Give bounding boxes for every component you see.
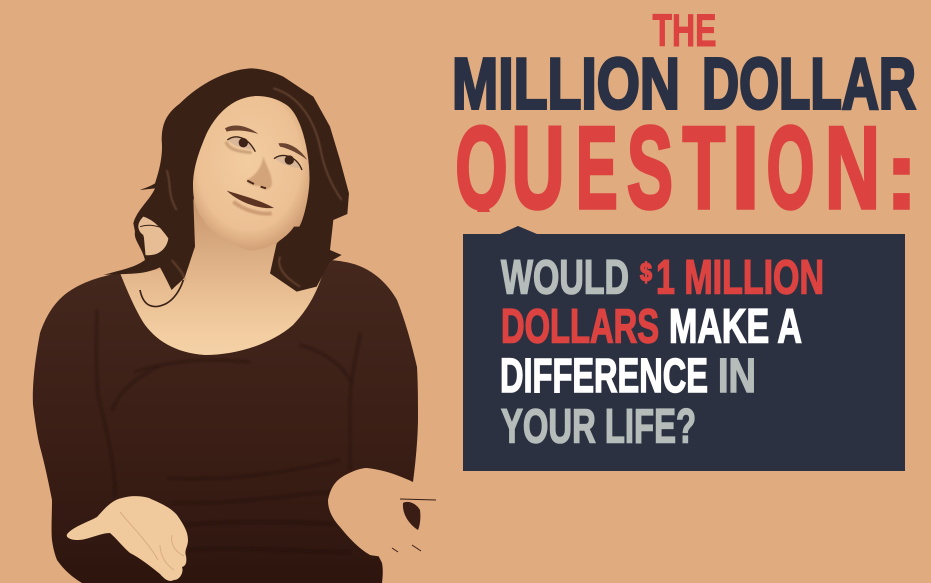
title: QUESTION:: O [766, 102, 814, 233]
line 2: DOLLARS [501, 300, 659, 354]
right hand dark patch [403, 502, 420, 530]
title: THE: THE [652, 5, 716, 56]
line 1: WOULD [501, 250, 629, 304]
line 3: DIFFERENCE [500, 349, 708, 403]
title: QUESTION:: I [731, 102, 760, 233]
speech box [463, 226, 905, 471]
hair sheen [167, 88, 342, 287]
line 1: 1 MILLION [656, 250, 824, 304]
title: QUESTION:: N [825, 102, 880, 233]
right hand cut-out [328, 468, 437, 557]
title: QUESTION:: : [886, 122, 917, 229]
nostrils [247, 181, 266, 188]
head [103, 68, 349, 307]
title: QUESTION:: U [511, 102, 565, 233]
left eye [226, 137, 255, 153]
line 1 [501, 250, 824, 304]
hair strand over chest [140, 280, 183, 307]
photo: shrugging woman [33, 68, 437, 583]
shirt folds [96, 310, 360, 552]
left eyebrow [225, 126, 258, 134]
box notch and panel [463, 226, 905, 471]
line 2: MAKE A [669, 300, 802, 354]
title: QUESTION:: S [627, 102, 673, 233]
title: QUESTION:: Q [455, 102, 508, 233]
lower lip shade [233, 202, 272, 214]
right eyebrow [278, 143, 307, 160]
hair [103, 68, 349, 292]
left hand [67, 496, 188, 581]
face [193, 96, 309, 251]
title: QUESTION:: T [682, 102, 725, 233]
line 3: IN [718, 349, 756, 403]
shirt [33, 260, 418, 583]
title: MILLION DOLLAR: MILLION [452, 44, 680, 124]
title: QUESTION:: E [576, 102, 618, 233]
mouth [227, 191, 274, 208]
line 1: $ [640, 257, 652, 287]
hair strands over patch [140, 225, 168, 255]
right hand stray marks [392, 499, 436, 552]
line 4: YOUR LIFE? [501, 400, 696, 454]
nose [247, 157, 272, 189]
title: QUESTION: [457, 124, 910, 212]
title: MILLION DOLLAR [452, 44, 916, 124]
left hand creases [120, 512, 184, 570]
neck and chest [118, 190, 330, 362]
light patch in hair [138, 217, 168, 255]
right eye [274, 155, 302, 170]
